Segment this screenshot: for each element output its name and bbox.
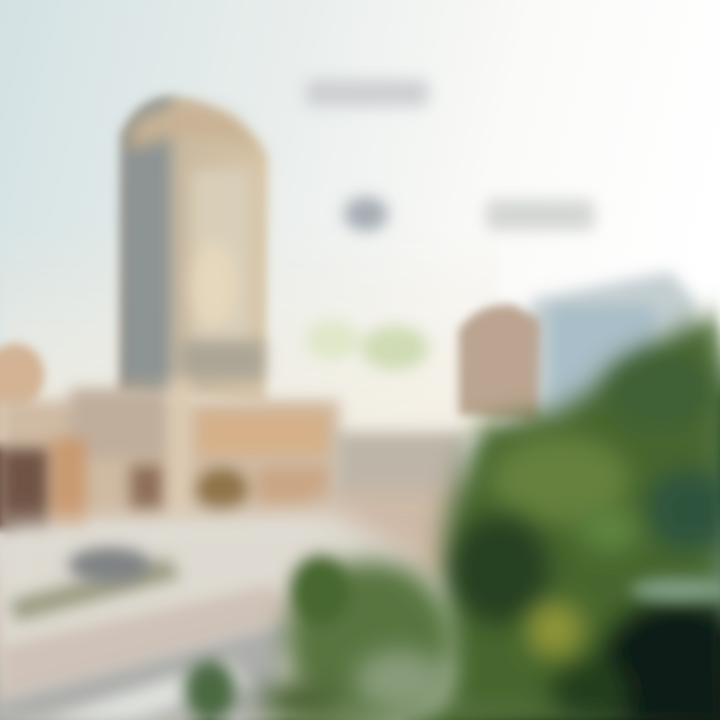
building: right glass block xyxy=(530,272,695,430)
icon: blurred central emblem xyxy=(344,197,388,231)
building: right round tan tower xyxy=(458,304,540,420)
label: blurred top caption xyxy=(306,80,428,106)
building: distant street blocks xyxy=(320,432,465,580)
icon: blurred green leaves xyxy=(305,320,429,370)
foliage: mid foreground bush xyxy=(184,555,455,720)
foliage: dark green foreground tree xyxy=(445,310,720,720)
background: lower haze xyxy=(0,220,500,440)
building: tall tower xyxy=(118,95,268,400)
street: foreground road and pavement xyxy=(0,510,420,720)
building: low podium xyxy=(0,380,340,533)
background: soft frame-edge colours xyxy=(0,320,720,720)
label: blurred right caption xyxy=(486,200,594,230)
building: left small dome xyxy=(0,343,45,407)
